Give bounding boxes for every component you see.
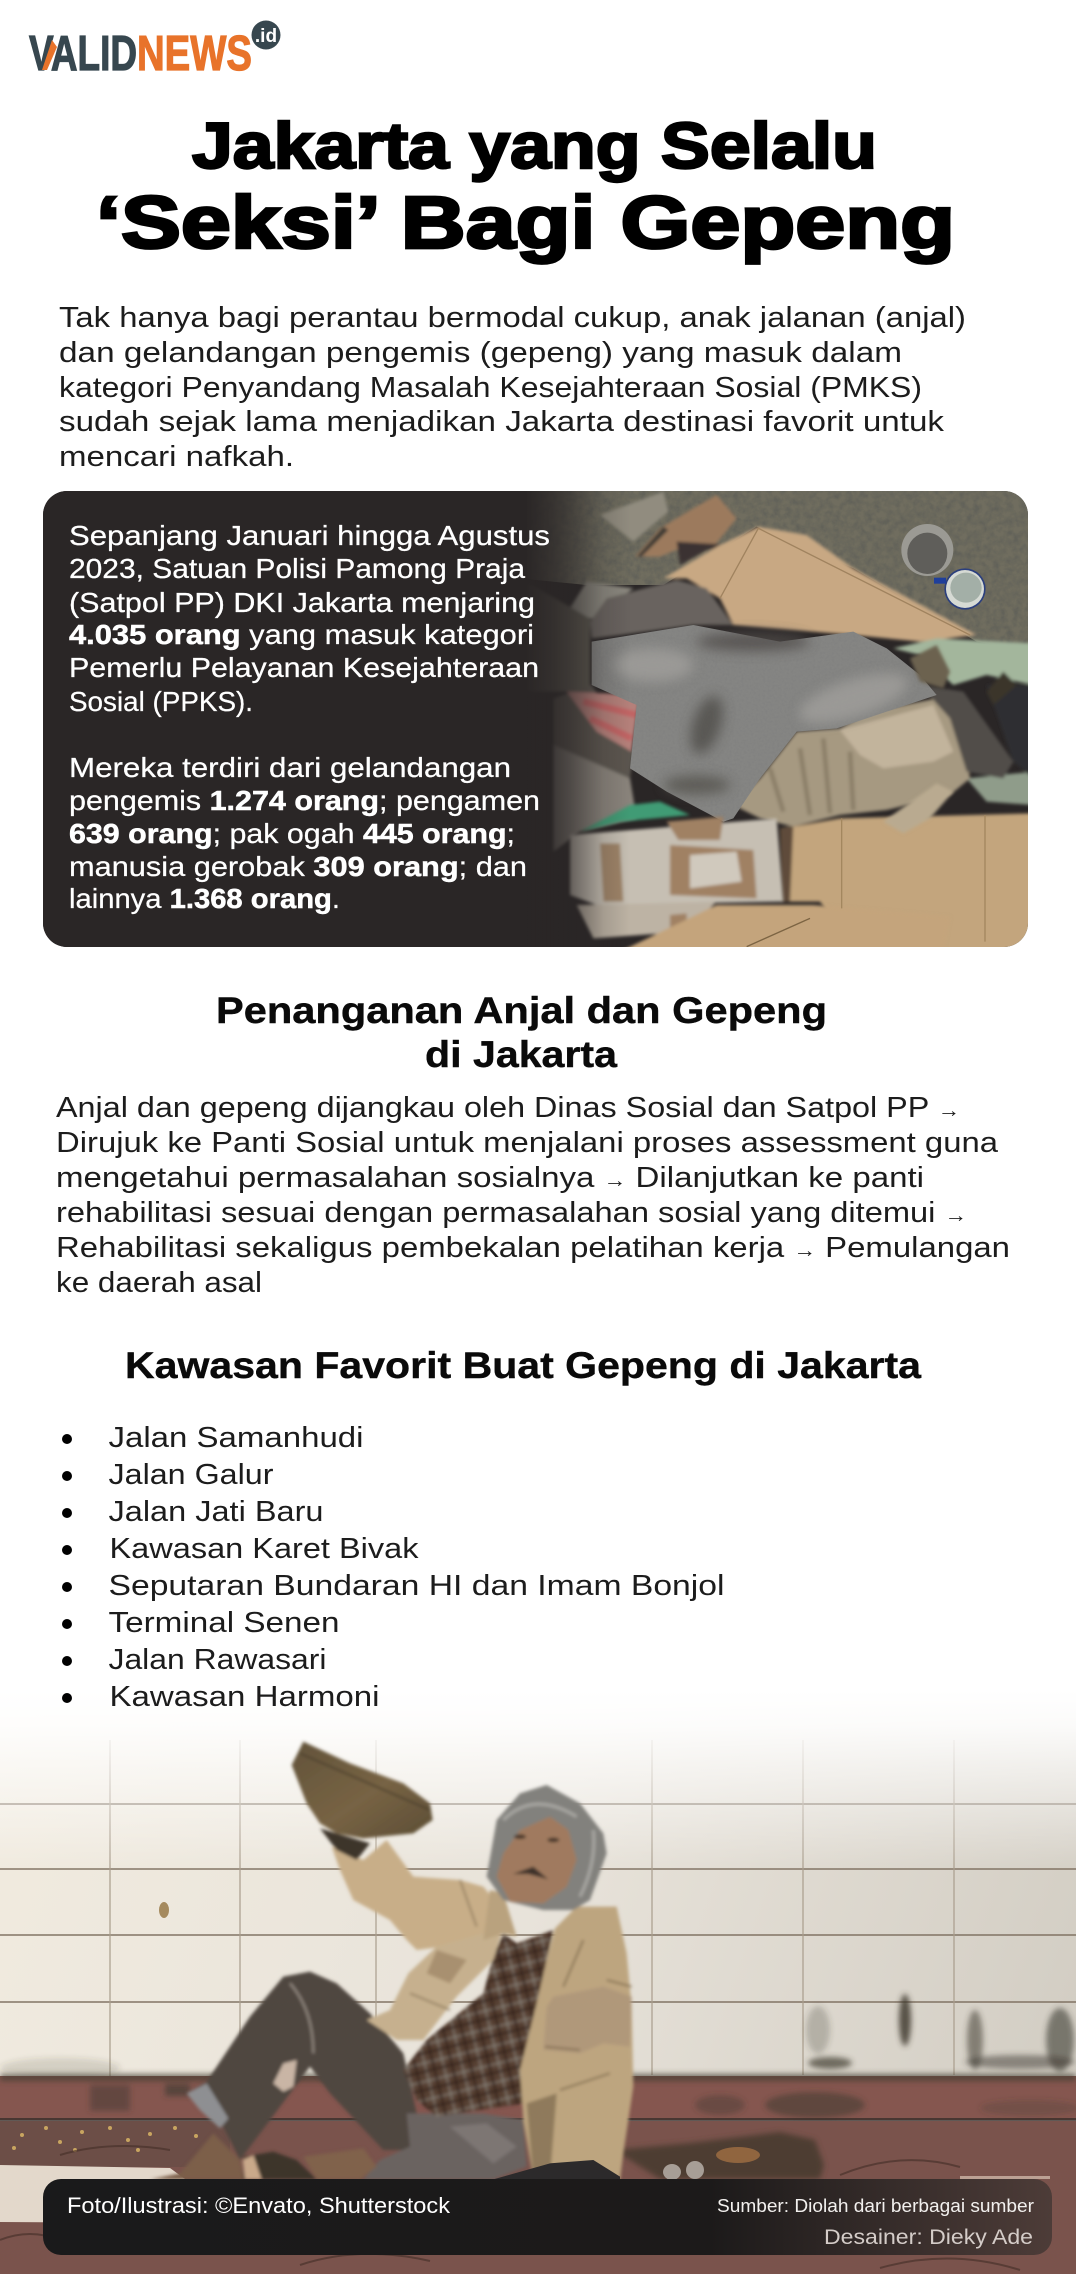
title: ‘Seksi’ Bagi Gepeng: [96, 181, 955, 264]
title: Jakarta yang Selalu: [192, 109, 877, 182]
intro text block: Tak hanya bagi perantau bermodal cukup, anak jalanan (anjal): [59, 302, 966, 334]
text block: handling process: Dirujuk ke Panti Sosial untuk menjalani proses assessment guna: [56, 1127, 999, 1159]
panel text: second paragraph: manusia gerobak 309 orang ; dan: [69, 851, 527, 882]
panel text: second paragraph: 639 orang ; pak ogah 445 orang ;: [69, 818, 515, 849]
man: lower trousers: [363, 2113, 527, 2179]
text block: handling process: Rehabilitasi sekaligus pembekalan pelatihan kerja → Pemulangan: [56, 1232, 1010, 1264]
list item 1: Jalan Samanhudi: [108, 1422, 364, 1454]
list: favourite locations: [62, 1422, 724, 1713]
logo: ValidNews.id: [29, 20, 280, 81]
photo: beggar holding up a hat: [0, 1690, 1076, 2274]
heading: Penanganan Anjal dan Gepeng di Jakarta: [216, 990, 827, 1075]
photo credit: Foto/Ilustrasi: ©Envato, Shutterstock: [67, 2193, 451, 2218]
panel text: first paragraph: 2023, Satuan Polisi Pamong Praja: [69, 553, 525, 584]
photo top fade: [0, 1690, 1076, 1870]
panel text: second paragraph: pengemis 1.274 orang ; pengamen: [69, 785, 540, 816]
intro text block: sudah sejak lama menjadikan Jakarta destinasi favorit untuk: [59, 406, 945, 438]
text block: handling process: Anjal dan gepeng dijangkau oleh Dinas Sosial dan Satpol PP →: [56, 1092, 960, 1124]
logo accent: orange chevron: [42, 40, 57, 70]
man: shoe sole: [493, 2160, 620, 2179]
man: raised sleeve and left jacket: [332, 1840, 503, 1950]
logo word: VALID: VALID: [29, 27, 137, 81]
man: collar: [483, 1890, 517, 1940]
man: feet: [150, 2133, 243, 2179]
photo background: wall and pavement: [0, 1690, 1076, 2274]
designer credit: Desainer: Dieky Ade: [824, 2226, 1033, 2249]
icon: metal cup: [901, 524, 953, 576]
intro text block: mencari nafkah.: [59, 441, 294, 473]
text block: handling process: [56, 1092, 1010, 1299]
logo badge: .id: .id: [255, 26, 277, 47]
list item 8: Kawasan Harmoni: [110, 1681, 380, 1713]
intro text block: dan gelandangan pengemis (gepeng) yang masuk dalam: [59, 337, 902, 369]
list item 5: Seputaran Bundaran HI dan Imam Bonjol: [108, 1570, 724, 1602]
photo: person sleeping on cardboard: [520, 485, 1033, 952]
panel text: first paragraph: Sepanjang Januari hingga Agustus: [69, 520, 550, 551]
heading: Penanganan Anjal dan Gepeng di Jakarta: di Jakarta: [425, 1034, 617, 1075]
logo badge: .id: [252, 20, 280, 50]
icon: cloth and glasses on the ground: [614, 2132, 824, 2180]
intro text block: [59, 302, 966, 473]
text block: handling process: ke daerah asal: [56, 1267, 262, 1299]
icon: enamel mug: [934, 568, 986, 610]
text block: handling process: rehabilitasi sesuai dengan permasalahan sosial yang ditemui →: [56, 1197, 967, 1229]
list item 2: Jalan Galur: [108, 1459, 274, 1491]
panel: Satpol PP statistics with photo: [43, 485, 1033, 952]
panel text: second paragraph: Mereka terdiri dari gelandangan: [69, 752, 511, 783]
intro text block: kategori Penyandang Masalah Kesejahteraan Sosial (PMKS): [59, 372, 922, 404]
panel text: second paragraph: lainnya 1.368 orang.: [69, 883, 340, 914]
panel text: first paragraph: 4.035 orang yang masuk kategori: [69, 619, 534, 650]
list item 4: Kawasan Karet Bivak: [110, 1533, 419, 1565]
panel text: first paragraph: (Satpol PP) DKI Jakarta menjaring: [69, 587, 535, 618]
source credit: Sumber: Diolah dari berbagai sumber: [717, 2196, 1034, 2216]
man: hat held up: [292, 1742, 433, 1838]
panel text: first paragraph: [69, 520, 550, 717]
panel text: first paragraph: Sosial (PPKS).: [69, 686, 253, 717]
man: jacket right: [520, 1907, 633, 2179]
heading: Kawasan Favorit: Kawasan Favorit Buat Gepeng di Jakarta: [125, 1345, 921, 1386]
list item 7: Jalan Rawasari: [108, 1644, 326, 1676]
heading: Penanganan Anjal dan Gepeng di Jakarta: Penanganan Anjal dan Gepeng: [216, 990, 827, 1031]
list item 3: Jalan Jati Baru: [108, 1496, 324, 1528]
footer bar: credits: [43, 2179, 1052, 2255]
panel text: first paragraph: Pemerlu Pelayanan Kesejahteraan: [69, 652, 539, 683]
photo: blanket: [592, 625, 937, 822]
text block: handling process: mengetahui permasalahan sosialnya → Dilanjutkan ke panti: [56, 1162, 924, 1194]
title: [96, 109, 955, 264]
figure: man: [150, 1742, 633, 2179]
man: face: [497, 1817, 577, 1903]
man: hair: [487, 1785, 607, 1910]
man: raised trouser leg: [187, 1972, 417, 2160]
logo word: NEWS: NEWS: [137, 27, 252, 81]
man: hand: [320, 1828, 370, 1860]
man: shirt: [403, 1930, 553, 2117]
list item 6: Terminal Senen: [108, 1607, 340, 1639]
panel text: second paragraph: [69, 752, 540, 914]
